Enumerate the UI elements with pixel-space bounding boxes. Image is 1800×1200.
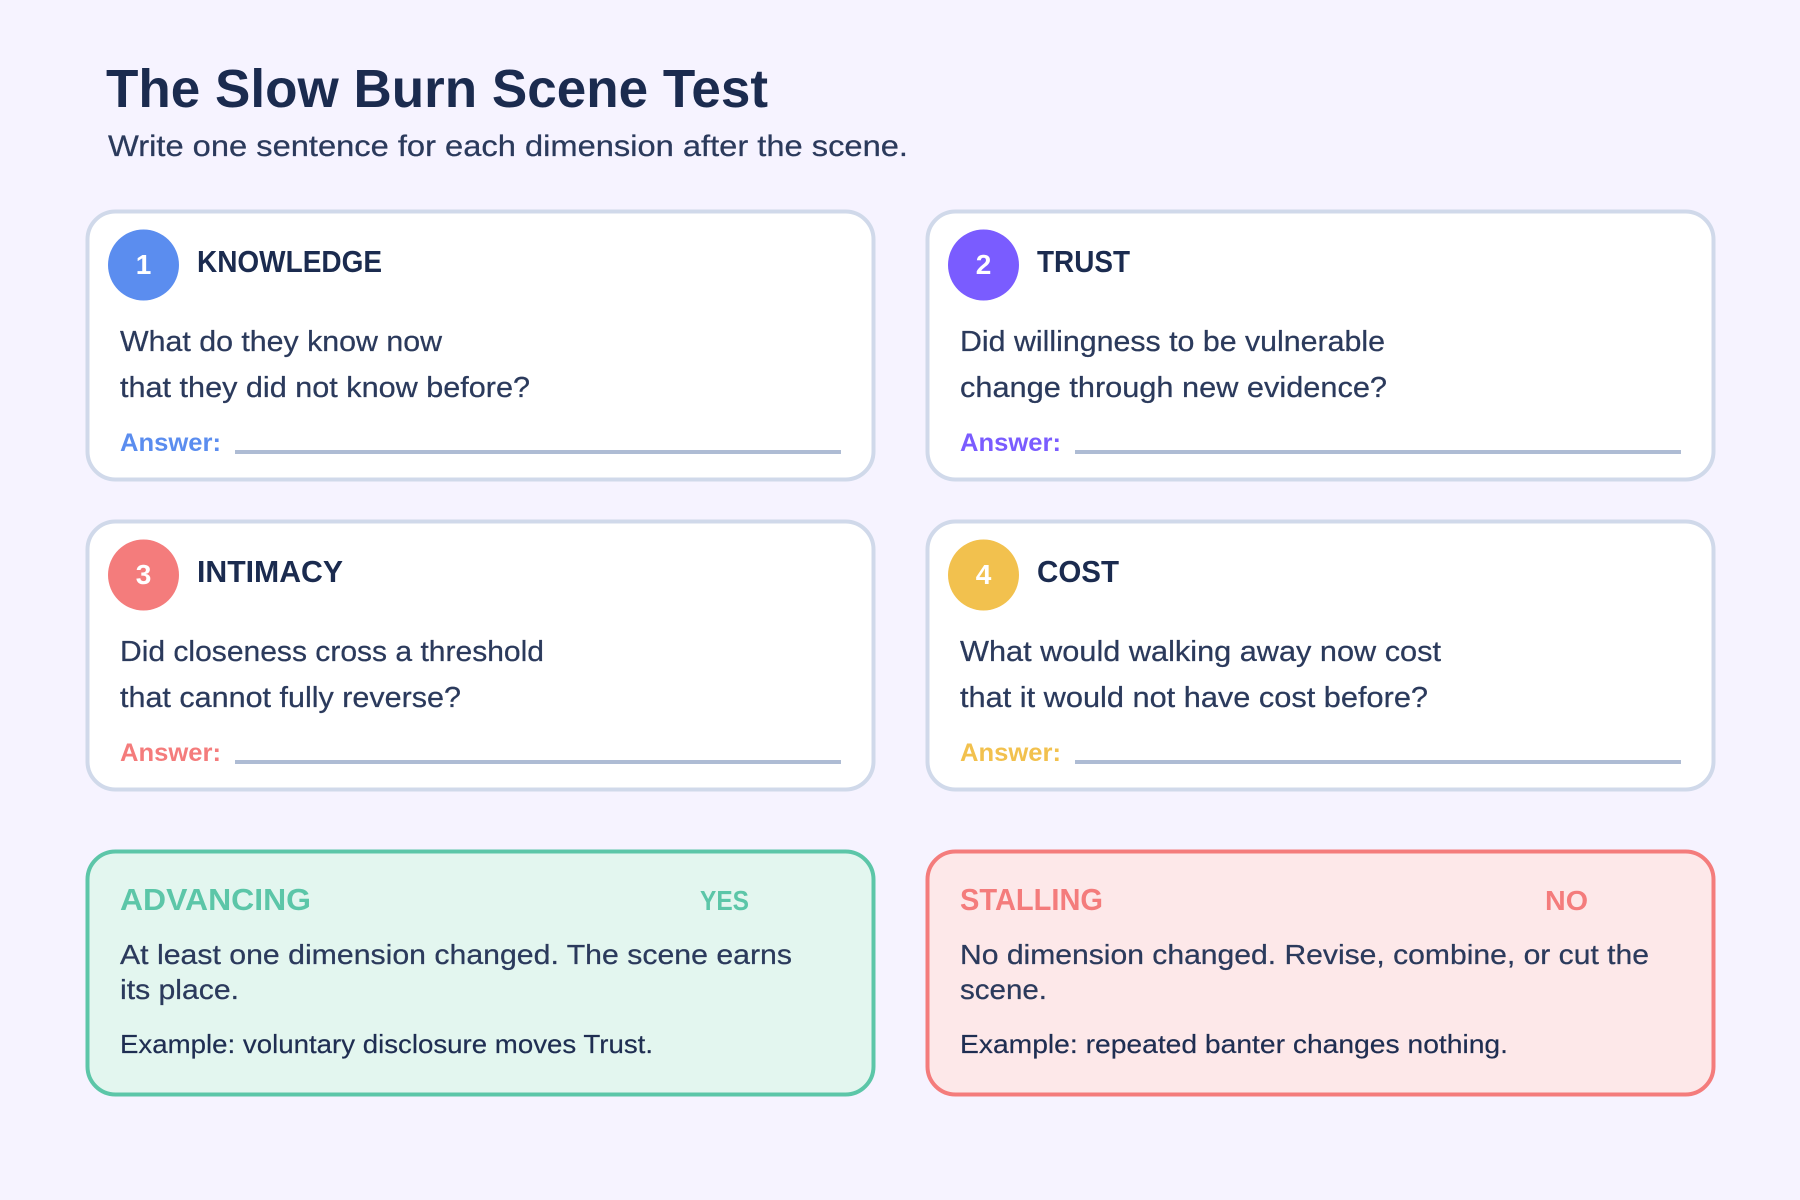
heading: knowledge: KNOWLEDGE bbox=[197, 244, 382, 279]
answer line: knowledge: Answer: bbox=[120, 429, 221, 457]
icon: number 1 badge: 1 bbox=[136, 249, 151, 280]
heading: stalling: STALLING bbox=[960, 882, 1103, 917]
answer line: intimacy: Answer: bbox=[120, 739, 221, 767]
panel: cost bbox=[928, 522, 1714, 790]
example: advancing: Example: voluntary disclosure moves Trust. bbox=[120, 1029, 653, 1059]
heading: cost: COST bbox=[1037, 554, 1119, 589]
question: cost bbox=[960, 636, 1441, 714]
icon: number 2 badge: 2 bbox=[976, 249, 991, 280]
heading: advancing: ADVANCING bbox=[120, 882, 311, 917]
panel: advancing bbox=[88, 852, 874, 1094]
answer line: cost: Answer: bbox=[960, 739, 1061, 767]
answer line: trust bbox=[960, 429, 1681, 457]
example: stalling: Example: repeated banter changes nothing. bbox=[960, 1029, 1508, 1059]
answer line: cost bbox=[960, 739, 1681, 767]
description: advancing: its place. bbox=[120, 974, 239, 1005]
icon: number 3 badge: 3 bbox=[136, 559, 151, 590]
question: intimacy bbox=[120, 636, 544, 714]
description: stalling bbox=[960, 939, 1649, 1005]
question: knowledge: What do they know now bbox=[120, 326, 443, 358]
question: knowledge: that they did not know before? bbox=[120, 372, 530, 404]
description: advancing bbox=[120, 939, 792, 1005]
panel: knowledge bbox=[88, 212, 874, 480]
title: The Slow Burn Scene Test bbox=[106, 59, 768, 119]
tag: no: NO bbox=[1545, 885, 1588, 916]
icon: number 1 badge bbox=[108, 230, 179, 300]
question: intimacy: Did closeness cross a threshold bbox=[120, 636, 544, 668]
icon: number 4 badge: 4 bbox=[976, 559, 992, 590]
panel: intimacy bbox=[88, 522, 874, 790]
tag: yes: YES bbox=[700, 885, 749, 916]
question: trust: Did willingness to be vulnerable bbox=[960, 326, 1385, 358]
question: cost: What would walking away now cost bbox=[960, 636, 1441, 668]
description: advancing: At least one dimension changed. The scene earns bbox=[120, 939, 792, 970]
icon: number 2 badge bbox=[948, 230, 1019, 300]
question: intimacy: that cannot fully reverse? bbox=[120, 682, 461, 714]
answer line: knowledge bbox=[120, 429, 841, 457]
description: stalling: scene. bbox=[960, 974, 1047, 1005]
question: trust: change through new evidence? bbox=[960, 372, 1387, 404]
panel: stalling bbox=[928, 852, 1714, 1094]
icon: number 3 badge bbox=[108, 540, 179, 610]
heading: intimacy: INTIMACY bbox=[197, 554, 343, 589]
description: stalling: No dimension changed. Revise, combine, or cut the bbox=[960, 939, 1649, 970]
panel: trust bbox=[928, 212, 1714, 480]
icon: number 4 badge bbox=[948, 540, 1019, 610]
question: trust bbox=[960, 326, 1387, 404]
question: cost: that it would not have cost before? bbox=[960, 682, 1428, 714]
question: knowledge bbox=[120, 326, 530, 404]
answer line: trust: Answer: bbox=[960, 429, 1061, 457]
subtitle: Write one sentence for each dimension after the scene. bbox=[108, 130, 908, 163]
answer line: intimacy bbox=[120, 739, 841, 767]
heading: trust: TRUST bbox=[1037, 244, 1130, 279]
